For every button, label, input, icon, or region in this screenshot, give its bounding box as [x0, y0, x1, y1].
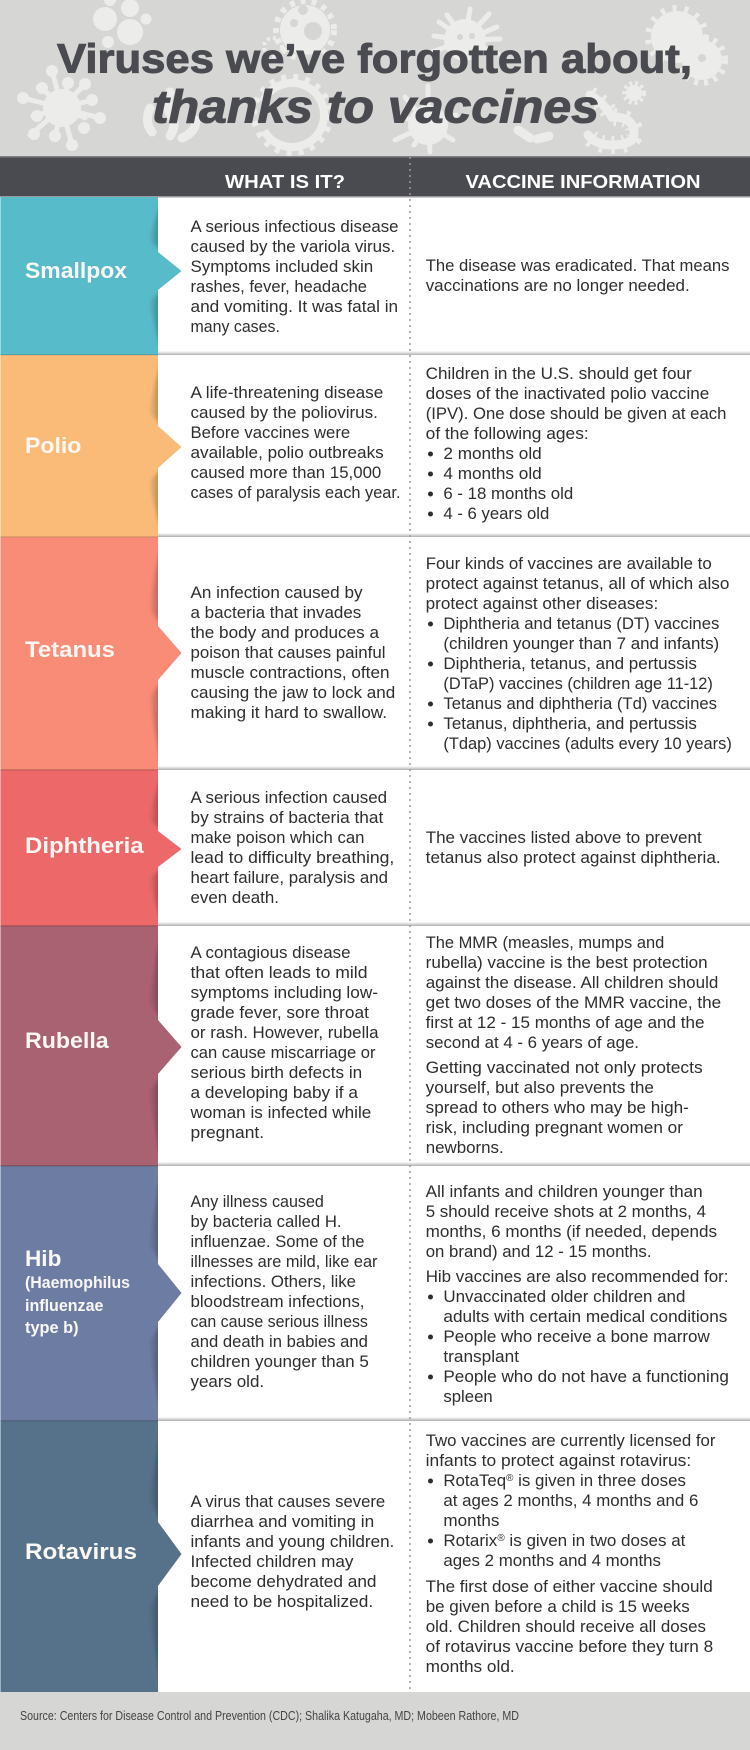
what is it text: Infected children may	[190, 1552, 354, 1571]
vaccine information text: second at 4 - 6 years of age.	[426, 1033, 639, 1052]
icon: ring gear	[251, 74, 333, 156]
vaccine information text: vaccinations are no longer needed.	[426, 276, 690, 295]
what is it text: Any illness caused	[190, 1192, 324, 1211]
vaccine information text: yourself, but also prevents the	[426, 1078, 654, 1097]
what is it text: An infection caused by	[190, 583, 363, 602]
vaccine information text: The first dose of either vaccine should	[426, 1577, 713, 1596]
row: Diphtheria	[0, 770, 721, 926]
vaccine information text: Tetanus and diphtheria (Td) vaccines	[443, 694, 717, 713]
vaccine information text: is given in two doses at	[505, 1531, 686, 1550]
table header: VACCINE INFORMATION	[466, 171, 700, 192]
what is it text: heart failure, paralysis and	[190, 868, 388, 887]
vaccine information text: Hib vaccines are also recommended for:	[426, 1267, 728, 1286]
label: Rotavirus	[25, 1539, 137, 1564]
vaccine information text: Tetanus, diphtheria, and pertussis	[443, 714, 697, 733]
label: Rubella	[25, 1028, 109, 1053]
icon: spiked virus lower	[395, 86, 456, 152]
what is it text: poison that causes painful	[190, 643, 386, 662]
vaccine information text: (children younger than 7 and infants)	[443, 634, 719, 653]
what is it text: A virus that causes severe	[190, 1492, 385, 1511]
what is it text: and death in babies and	[190, 1332, 368, 1351]
what is it text: caused by the poliovirus.	[190, 403, 378, 422]
what is it text: available, polio outbreaks	[190, 443, 384, 462]
vaccine information text: old. Children should receive all doses	[426, 1617, 706, 1636]
vaccine information text: risk, including pregnant women or	[426, 1118, 683, 1137]
what is it text: many cases.	[190, 317, 280, 336]
row: Rubella	[0, 926, 721, 1166]
icon: rod bacteria	[518, 130, 549, 139]
table header	[0, 156, 750, 198]
vaccine information text: Diphtheria, tetanus, and pertussis	[443, 654, 697, 673]
what is it text: caused more than 15,000	[190, 463, 381, 482]
what is it text: causing the jaw to lock and	[190, 683, 395, 702]
vaccine information text: rubella) vaccine is the best protection	[426, 953, 708, 972]
vaccine information text: spread to others who may be high-	[426, 1098, 689, 1117]
row: Polio	[0, 355, 726, 537]
vaccine information text: RotaTeq	[443, 1471, 507, 1490]
vaccine information text: at ages 2 months, 4 months and 6	[443, 1491, 698, 1510]
label: Polio	[25, 433, 81, 458]
icon: gear virus top	[264, 1, 334, 59]
vaccine information text: People who receive a bone marrow	[443, 1327, 711, 1346]
what is it text: make poison which can	[190, 828, 364, 847]
vaccine information text: Two vaccines are currently licensed for	[426, 1431, 716, 1450]
vaccine information text: of rotavirus vaccine before they turn 8	[426, 1637, 713, 1656]
what is it text: influenzae. Some of the	[190, 1232, 364, 1251]
what is it text	[190, 383, 400, 502]
title: Viruses we’ve forgotten about,	[57, 36, 692, 82]
what is it text	[190, 788, 394, 907]
row: Smallpox	[0, 197, 729, 355]
vaccine information text	[426, 933, 721, 1157]
what is it text: making it hard to swallow.	[190, 703, 387, 722]
icon: bubble cluster	[93, 0, 152, 48]
vaccine information text: The vaccines listed above to prevent	[426, 828, 702, 847]
label: Tetanus	[25, 637, 115, 662]
what is it text: illnesses are mild, like ear	[190, 1252, 378, 1271]
what is it text: by strains of bacteria that	[190, 808, 384, 827]
vaccine information text: Rotarix	[443, 1531, 497, 1550]
row: Tetanus	[0, 537, 732, 770]
what is it text: muscle contractions, often	[190, 663, 390, 682]
vaccine information text: spleen	[443, 1387, 493, 1406]
icon: curved bacterium	[588, 95, 634, 145]
what is it text: infants and young children.	[190, 1532, 394, 1551]
label: Diphtheria	[25, 833, 144, 858]
vaccine information text	[426, 1182, 729, 1406]
vaccine information text: on brand) and 12 - 15 months.	[426, 1242, 652, 1261]
vaccine information text: is given in three doses	[513, 1471, 686, 1490]
vaccine information text: against the disease. All children should	[426, 973, 718, 992]
vaccine information text: 2 months old	[443, 444, 542, 463]
what is it text	[190, 583, 395, 722]
color block with arrow	[0, 355, 182, 537]
vaccine information text: 4 - 6 years old	[443, 504, 549, 523]
label: influenzae	[25, 1296, 103, 1315]
vaccine information text	[426, 364, 726, 523]
vaccine information text: doses of the inactivated polio vaccine	[426, 384, 709, 403]
table header: WHAT IS IT?	[225, 171, 345, 192]
label: (Haemophilus	[25, 1273, 130, 1292]
what is it text: A serious infection caused	[190, 788, 387, 807]
what is it text: grade fever, sore throat	[190, 1003, 369, 1022]
what is it text: and vomiting. It was fatal in	[190, 297, 398, 316]
icon: splat virus	[17, 65, 106, 151]
what is it text: by bacteria called H.	[190, 1212, 342, 1231]
what is it text: years old.	[190, 1372, 264, 1391]
vaccine information text: 6 - 18 months old	[443, 484, 573, 503]
color block with arrow	[0, 1421, 182, 1692]
title: thanks to vaccines	[152, 80, 599, 132]
vaccine information text: newborns.	[426, 1138, 504, 1157]
what is it text: become dehydrated and	[190, 1572, 376, 1591]
footer source line: Source: Centers for Disease Control and Prevention (CDC); Shalika Katugaha, MD; Mobeen Rathore, MD	[20, 1709, 519, 1723]
vaccine information text: Four kinds of vaccines are available to	[426, 554, 712, 573]
what is it text: a developing baby if a	[190, 1083, 358, 1102]
vaccine information text: People who do not have a functioning	[443, 1367, 729, 1386]
what is it text: cases of paralysis each year.	[190, 483, 400, 502]
what is it text: can cause miscarriage or	[190, 1043, 376, 1062]
what is it text: that often leads to mild	[190, 963, 368, 982]
vaccine information text: get two doses of the MMR vaccine, the	[426, 993, 721, 1012]
vaccine information text: adults with certain medical conditions	[443, 1307, 727, 1326]
what is it text: A contagious disease	[190, 943, 350, 962]
title banner	[0, 0, 750, 157]
what is it text	[189, 943, 379, 1142]
what is it text: a bacteria that invades	[190, 603, 361, 622]
what is it text	[190, 1192, 378, 1391]
vaccine information text: months old.	[426, 1657, 515, 1676]
label: Hib	[25, 1246, 61, 1271]
what is it text: bloodstream infections,	[190, 1292, 364, 1311]
label: Smallpox	[25, 258, 128, 283]
vaccine information text: (DTaP) vaccines (children age 11-12)	[443, 674, 713, 693]
color block with arrow	[0, 926, 182, 1166]
vaccine information text: All infants and children younger than	[426, 1182, 703, 1201]
vaccine information text: be given before a child is 15 weeks	[426, 1597, 690, 1616]
row: Hib	[0, 1166, 729, 1421]
label	[25, 1246, 130, 1337]
vaccine information text: ®	[497, 1533, 505, 1544]
what is it text: symptoms including low-	[190, 983, 378, 1002]
what is it text: infections. Others, like	[190, 1272, 356, 1291]
vaccine information text	[426, 554, 732, 753]
what is it text: rashes, fever, headache	[190, 277, 367, 296]
vaccine information text: Unvaccinated older children and	[443, 1287, 685, 1306]
vaccine information text	[426, 256, 729, 295]
vaccine information text: Children in the U.S. should get four	[426, 364, 692, 383]
what is it text: serious birth defects in	[190, 1063, 362, 1082]
vaccine information text: protect against other diseases:	[426, 594, 658, 613]
title	[57, 36, 692, 132]
icon: small gear	[624, 83, 644, 103]
vaccine information text: Getting vaccinated not only protects	[426, 1058, 703, 1077]
vaccine information text: 5 should receive shots at 2 months, 4	[426, 1202, 706, 1221]
what is it text: Before vaccines were	[190, 423, 350, 442]
color block with arrow	[0, 537, 182, 770]
vaccine information text: of the following ages:	[426, 424, 589, 443]
what is it text: the body and produces a	[190, 623, 380, 642]
vaccine information text: transplant	[443, 1347, 519, 1366]
what is it text: Symptoms included skin	[190, 257, 373, 276]
vaccine information text: ages 2 months and 4 months	[443, 1551, 661, 1570]
vaccine information text: Diphtheria and tetanus (DT) vaccines	[443, 614, 719, 633]
icon: worm bacteria	[147, 92, 196, 138]
color block with arrow	[0, 770, 182, 926]
label: type b)	[25, 1318, 79, 1337]
vaccine information text	[426, 828, 721, 867]
what is it text: pregnant.	[190, 1123, 264, 1142]
vaccine information text: 4 months old	[443, 464, 542, 483]
color block with arrow	[0, 1166, 182, 1421]
what is it text: A serious infectious disease	[190, 217, 398, 236]
vaccine information text: months	[443, 1511, 499, 1530]
what is it text: caused by the variola virus.	[190, 237, 395, 256]
vaccine information text: infants to protect against rotavirus:	[426, 1451, 691, 1470]
what is it text: woman is infected while	[189, 1103, 371, 1122]
icon: spiked virus	[432, 9, 500, 61]
what is it text: can cause serious illness	[190, 1312, 368, 1331]
vaccine information text: The MMR (measles, mumps and	[426, 933, 664, 952]
vaccine information text: (IPV). One dose should be given at each	[426, 404, 726, 423]
footer source line	[0, 1692, 750, 1750]
vaccine information text: protect against tetanus, all of which also	[426, 574, 729, 593]
row: Rotavirus	[0, 1421, 716, 1692]
what is it text: even death.	[190, 888, 279, 907]
what is it text	[190, 1492, 394, 1611]
icon: gear virus right	[648, 8, 725, 83]
what is it text: diarrhea and vomiting in	[190, 1512, 374, 1531]
vaccine information text: The disease was eradicated. That means	[426, 256, 729, 275]
vaccine information text: months, 6 months (if needed, depends	[426, 1222, 717, 1241]
color block with arrow	[0, 197, 182, 355]
vaccine information text: first at 12 - 15 months of age and the	[426, 1013, 704, 1032]
what is it text: children younger than 5	[190, 1352, 369, 1371]
vaccine information text: tetanus also protect against diphtheria.	[426, 848, 721, 867]
vaccine information text	[426, 1431, 716, 1676]
vaccine information text: (Tdap) vaccines (adults every 10 years)	[443, 734, 732, 753]
what is it text: need to be hospitalized.	[190, 1592, 373, 1611]
what is it text: lead to difficulty breathing,	[190, 848, 394, 867]
vaccine information text: ®	[506, 1473, 514, 1484]
what is it text	[190, 217, 398, 336]
what is it text: or rash. However, rubella	[190, 1023, 379, 1042]
what is it text: A life-threatening disease	[190, 383, 383, 402]
